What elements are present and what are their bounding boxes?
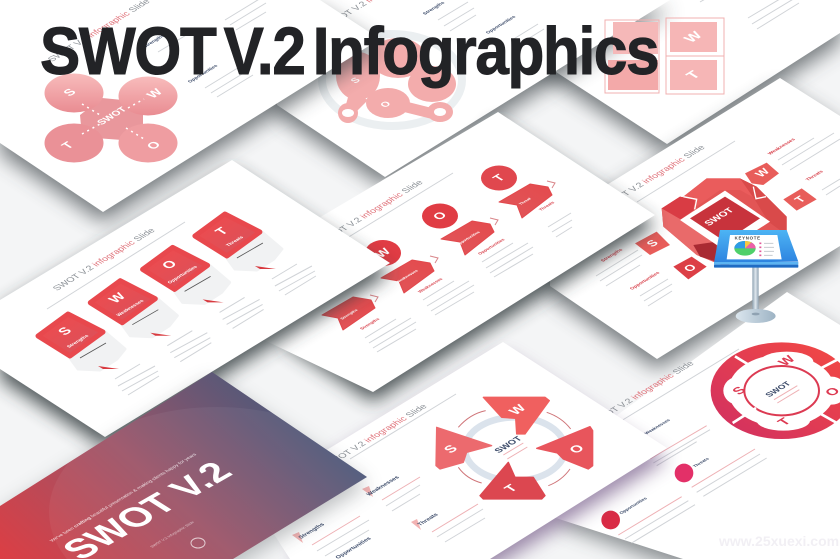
ring diagram: T <box>774 415 794 428</box>
slide: purple cover <box>0 372 385 559</box>
card O <box>143 247 264 328</box>
title: SWOT V.2 Infographics <box>40 13 658 89</box>
weaknesses text <box>767 133 840 170</box>
card T: Threats <box>225 235 245 248</box>
threats text: Threats <box>805 169 825 182</box>
slide title: SWOT V.2 infographic Slide <box>50 227 157 292</box>
circle O <box>422 204 458 228</box>
slide: top centre with blobs: O <box>378 100 394 110</box>
card S: S <box>55 325 75 337</box>
threats text <box>411 504 485 542</box>
cover subtitle: SWOT V.2 Infographic Slide <box>149 520 195 549</box>
slide: top centre with blobs <box>277 0 670 187</box>
arrow O <box>441 218 533 277</box>
card T: T <box>212 225 232 237</box>
pie chart <box>734 241 756 256</box>
slide: top centre with blobs: Opportunities <box>485 15 518 35</box>
slide: top left with circles <box>0 0 380 222</box>
slide text lines <box>700 0 800 29</box>
slide text: Strengths <box>422 1 447 16</box>
swot band diagram: SWOT <box>702 206 737 228</box>
strengths text <box>596 248 642 286</box>
slide: bottom right with ring <box>500 292 840 559</box>
card O: O <box>158 258 180 271</box>
slide title: SWOT V.2 infographic Slide <box>322 403 429 468</box>
card O: Opportunities <box>166 265 199 285</box>
circle W <box>365 240 401 266</box>
threats text: Threats <box>417 513 440 527</box>
arrow S <box>322 295 416 352</box>
circle diagram: T <box>59 140 77 151</box>
arrow T: Threat <box>518 196 533 206</box>
cycle diagram: S <box>441 443 461 455</box>
cycle diagram <box>436 397 593 499</box>
swot band diagram: W <box>752 167 773 179</box>
card W <box>90 281 211 362</box>
arrow T: Threats <box>538 200 556 212</box>
weaknesses text <box>362 475 420 511</box>
blob diagram <box>336 38 456 123</box>
arrow W: Weaknesses <box>395 269 419 284</box>
weaknesses text: Weaknesses <box>366 475 401 497</box>
cycle diagram: T <box>501 482 521 494</box>
swot band diagram: T <box>792 194 809 205</box>
squares diagram: W <box>681 29 707 45</box>
circle T: T <box>490 172 508 184</box>
circle W: W <box>372 246 394 260</box>
strengths text: Strengths <box>600 248 625 263</box>
card S <box>38 314 159 395</box>
threats text: Threats <box>692 457 711 468</box>
arrow O: Opportunities <box>477 237 506 256</box>
slide: keynote right <box>550 78 840 369</box>
opportunities text: Opportunities <box>629 271 662 291</box>
slide title: SWOT V.2 infographic Slide <box>600 144 707 209</box>
weaknesses text <box>643 418 710 466</box>
circle diagram: W <box>144 87 166 100</box>
slide title: SWOT V.2 infographic Slide <box>589 360 696 425</box>
tags <box>635 163 817 279</box>
circle diagram: SWOT <box>95 106 130 127</box>
circle diagram: O <box>144 139 164 152</box>
arrow T <box>499 181 572 237</box>
arrow O: Opportunities <box>455 230 481 246</box>
weaknesses text: Weaknesses <box>767 137 797 156</box>
opportunities text <box>629 271 672 306</box>
card S: Strengths <box>66 334 91 349</box>
strengths text: Strengths <box>298 522 326 540</box>
card W: Weaknesses <box>115 299 146 318</box>
cover icon <box>191 538 205 548</box>
card T <box>195 214 316 295</box>
slide: left with cards <box>0 160 390 447</box>
threats text <box>675 449 767 496</box>
card W: W <box>105 290 129 305</box>
slide: bottom centre with arrows <box>250 342 667 559</box>
squares diagram: T <box>683 69 704 82</box>
watermark: www.25xuexi.com <box>718 533 839 549</box>
swot centre <box>690 197 760 242</box>
ring diagram: S <box>729 384 749 397</box>
slide text: Strengths <box>142 34 167 49</box>
blob ring <box>322 34 462 126</box>
strengths text <box>292 516 369 556</box>
arrow S: Strengths <box>359 317 381 331</box>
keynote icon <box>714 230 798 323</box>
threats text <box>805 169 840 195</box>
ring diagram <box>711 342 840 439</box>
circle diagram <box>44 74 178 162</box>
arrow W <box>381 256 474 315</box>
slide: top left with circles: Opportunities <box>187 64 220 84</box>
circle T <box>481 166 517 190</box>
swot band diagram: S <box>644 238 662 249</box>
slide: centre with arrows <box>180 112 655 402</box>
arrow W: Weaknesses <box>417 277 444 294</box>
swot band diagram: O <box>681 262 700 274</box>
cycle diagram: SWOT <box>492 435 524 454</box>
cycle diagram: W <box>506 402 529 417</box>
squares diagram <box>605 18 724 94</box>
ring diagram: W <box>775 353 799 368</box>
slide: top centre with blobs: S <box>349 76 364 85</box>
opportunities text <box>601 496 695 543</box>
weaknesses text: Weaknesses <box>643 418 672 435</box>
slide: top right with squares <box>445 0 840 154</box>
cover circle <box>49 459 366 559</box>
circle O: O <box>430 210 450 222</box>
cover tagline: We've been crafting beautiful presentation & making clients happy for years <box>49 452 199 543</box>
circle diagram: S <box>60 87 79 98</box>
arrow S: Strengths <box>339 308 359 320</box>
cycle diagram: O <box>566 442 587 456</box>
opportunities text: Opportunities <box>618 496 649 515</box>
swot band diagram <box>635 163 817 279</box>
slide title: SWOT V.2 infographic Slide <box>318 179 425 244</box>
ring diagram: SWOT <box>763 379 794 398</box>
keynote icon: KEYNOTE <box>735 236 760 241</box>
